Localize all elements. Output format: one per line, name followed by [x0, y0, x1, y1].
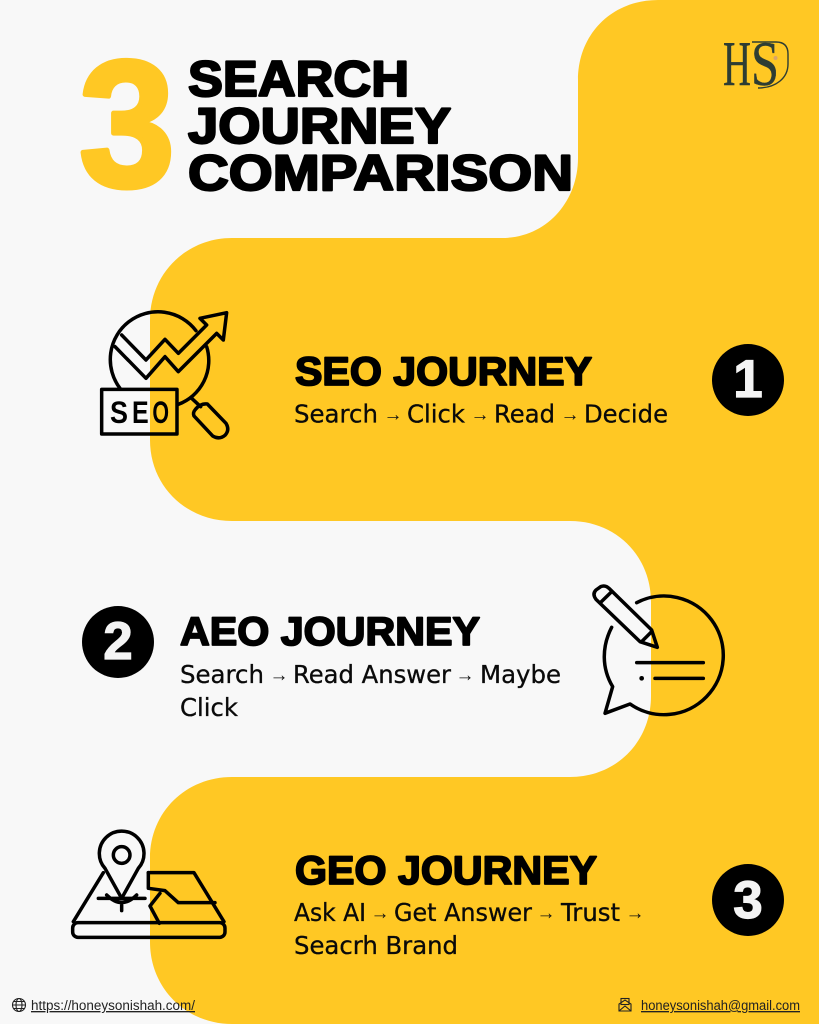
text: GEO steps: →	[536, 903, 556, 924]
icon: SEO magnifier with growth arrow: S	[110, 395, 128, 430]
text: email address: honeysonishah@gmail.com	[641, 998, 800, 1013]
title	[79, 24, 573, 225]
big number 3: 3	[79, 24, 175, 225]
section: AEO journey	[82, 586, 723, 722]
badge: number 1: 1	[733, 350, 763, 409]
section: SEO journey	[102, 312, 784, 438]
section: GEO journey	[73, 831, 784, 960]
text: GEO steps: Get Answer	[394, 898, 533, 927]
icon: SEO magnifier with growth arrow: O	[152, 395, 169, 430]
text: GEO steps: →	[626, 903, 644, 924]
text: GEO steps: Trust	[560, 898, 620, 927]
footer: email link	[619, 998, 800, 1013]
icon: globe	[12, 998, 26, 1012]
text: SEO steps	[294, 400, 668, 428]
title text: SEARCH	[188, 51, 409, 107]
text: SEO steps: Click	[407, 400, 466, 428]
badge: number 3	[712, 864, 784, 936]
text: SEO steps: Search	[294, 400, 378, 428]
text: SEO steps: →	[470, 404, 490, 426]
title text: COMPARISON	[188, 145, 573, 201]
title text	[188, 51, 573, 201]
text: AEO steps: →	[270, 665, 288, 686]
text: SEO steps: Decide	[584, 400, 668, 428]
icon: SEO magnifier with growth arrow: E	[132, 395, 149, 430]
text: GEO steps	[294, 898, 644, 960]
badge: number 2: 2	[103, 612, 133, 671]
icon: speech bubble with pencil	[594, 586, 723, 715]
logo: HS monogram: S	[751, 29, 779, 99]
text: AEO steps: Maybe	[480, 660, 561, 689]
heading: GEO journey: GEO JOURNEY	[295, 849, 597, 893]
heading: SEO journey: SEO JOURNEY	[295, 350, 592, 394]
text: AEO steps: Read Answer	[293, 660, 452, 689]
text: website URL: https://honeysonishah.com/	[31, 998, 195, 1013]
logo: HS monogram: H	[723, 29, 751, 99]
text: SEO steps: Read	[494, 400, 555, 428]
icon: map with location pin	[73, 831, 225, 937]
heading: AEO journey: AEO JOURNEY	[180, 610, 480, 654]
text: SEO steps: →	[384, 404, 402, 426]
icon: SEO magnifier with growth arrow	[102, 312, 228, 438]
footer: website link	[12, 998, 195, 1013]
text: GEO steps: Seacrh Brand	[294, 931, 458, 960]
text: AEO steps: →	[456, 665, 474, 686]
text: AEO steps: Search	[180, 660, 264, 689]
text: AEO steps	[180, 660, 561, 722]
icon: envelope	[619, 998, 631, 1011]
text: SEO steps: →	[560, 404, 580, 426]
badge: number 3: 3	[733, 871, 763, 930]
title text: JOURNEY	[188, 98, 451, 154]
text: GEO steps: →	[370, 903, 390, 924]
badge: number 2	[82, 606, 154, 678]
text: GEO steps: Ask AI	[294, 898, 366, 927]
text: AEO steps: Click	[180, 693, 239, 722]
badge: number 1	[712, 344, 784, 416]
